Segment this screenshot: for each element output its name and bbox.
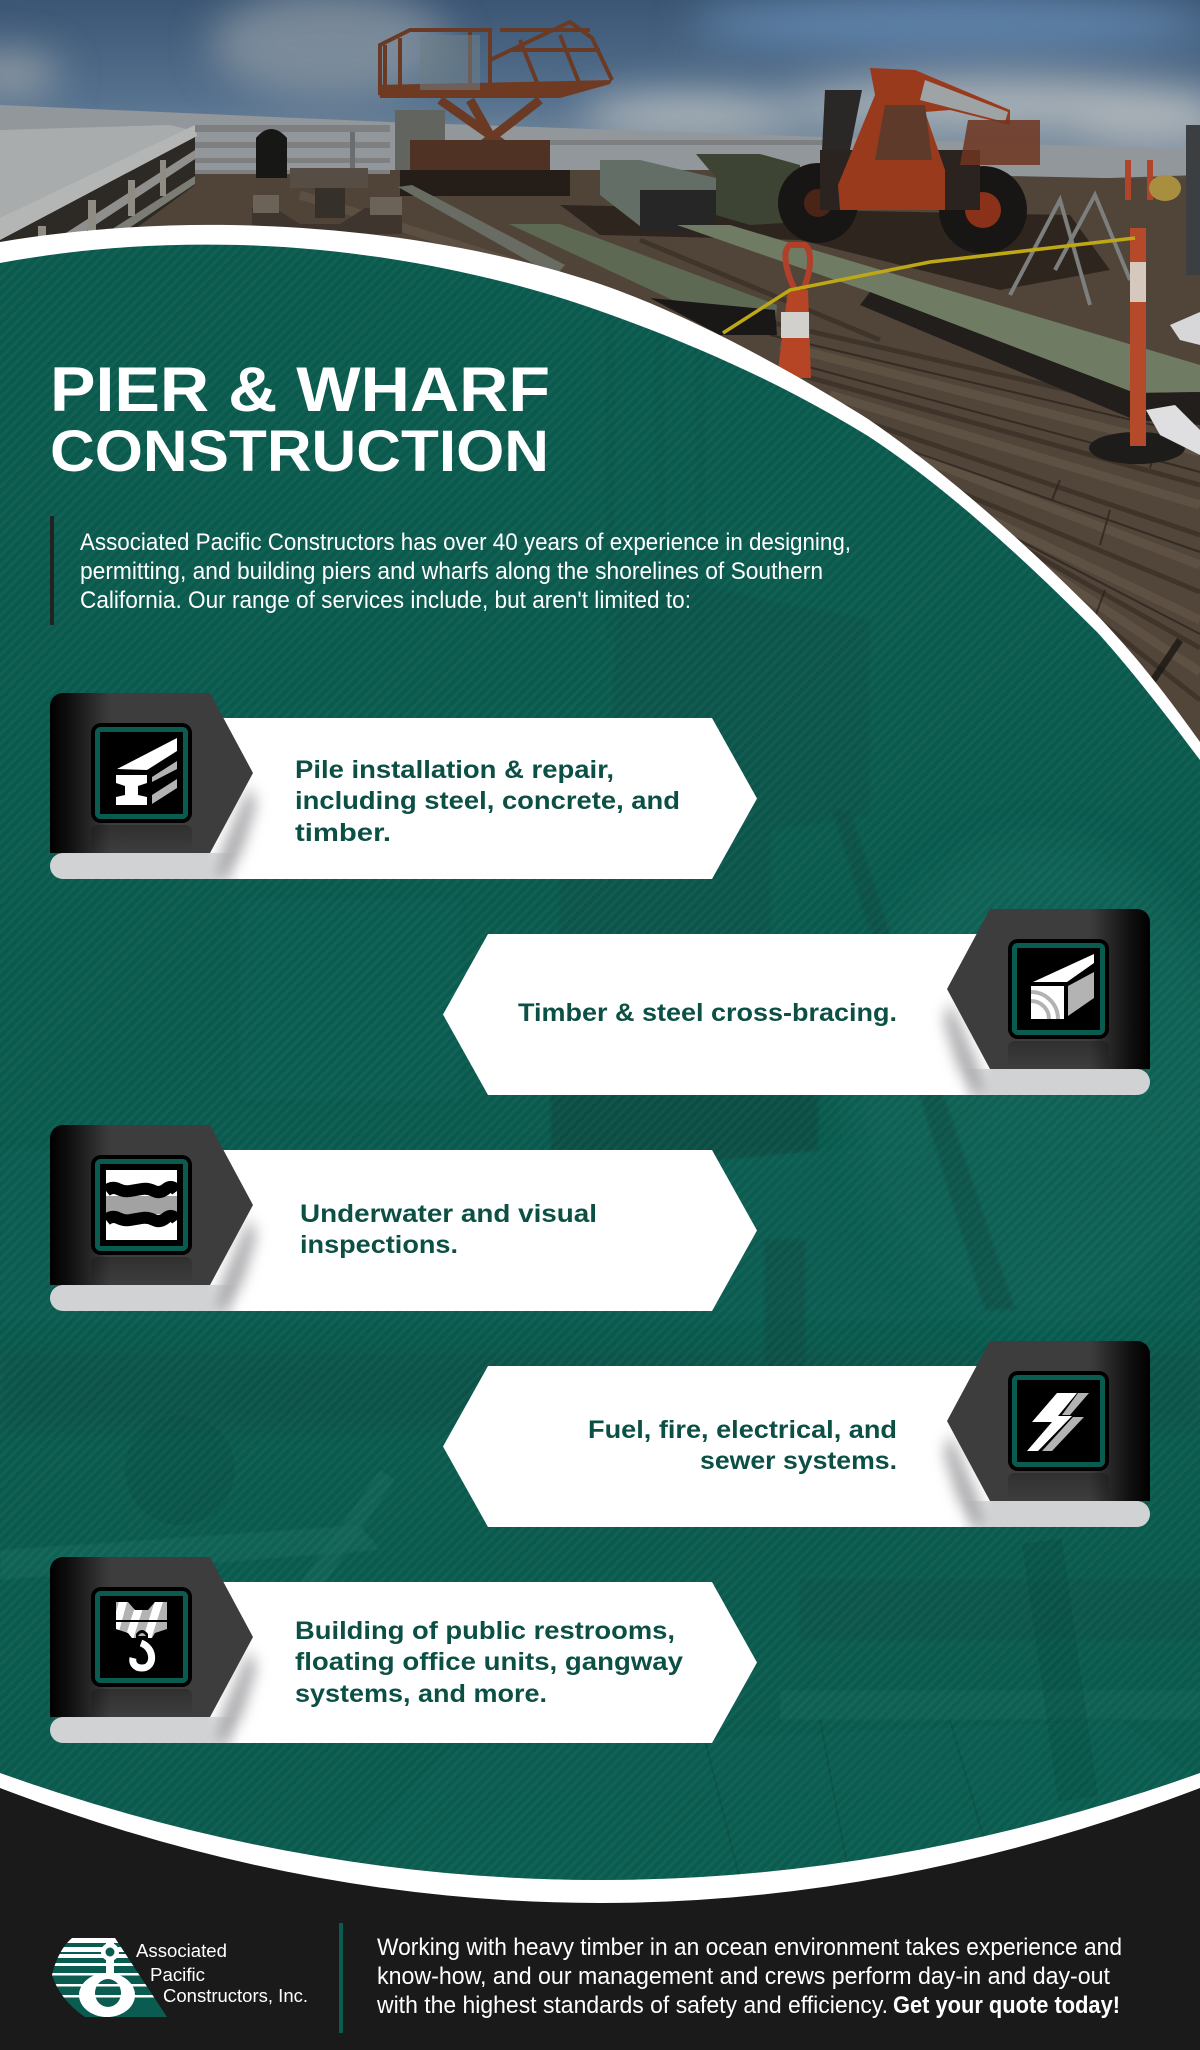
icon: water waves bbox=[106, 1170, 177, 1240]
card text bbox=[300, 1200, 597, 1259]
intro text: California. Our range of services include, but aren't limited to: bbox=[80, 587, 691, 614]
photo: pier deck with construction equipment bbox=[0, 0, 1200, 800]
card text bbox=[295, 756, 680, 847]
card 5: public restrooms and more bbox=[50, 1557, 757, 1743]
footer text bbox=[376, 1934, 1122, 2019]
card text: inspections. bbox=[300, 1231, 458, 1259]
right-edge fence and far cones bbox=[1186, 125, 1200, 275]
barrier cones and poles bbox=[777, 228, 1200, 464]
card 3: inspections bbox=[50, 1125, 757, 1311]
shadows under equipment bbox=[560, 205, 1110, 290]
icon: steel I-beam bbox=[116, 738, 177, 805]
card text: Timber & steel cross-bracing. bbox=[518, 999, 897, 1027]
card 2: cross-bracing bbox=[443, 909, 1150, 1095]
yellow safety tape bbox=[723, 238, 1135, 333]
logo wordmark: Pacific bbox=[150, 1965, 205, 1985]
logo wordmark: Associated bbox=[136, 1941, 227, 1961]
card text: Pile installation & repair, bbox=[295, 756, 614, 784]
icon: lightning bolt bbox=[1027, 1393, 1089, 1451]
card text: timber. bbox=[295, 819, 391, 847]
card 1: pile installation bbox=[50, 693, 757, 879]
timber beams bbox=[677, 225, 1200, 393]
footer divider bbox=[339, 1923, 343, 2033]
plank bands bbox=[300, 195, 1200, 700]
title bbox=[50, 355, 550, 484]
logo mark bbox=[50, 1938, 170, 2017]
card text bbox=[588, 1416, 897, 1475]
intro text: permitting, and building piers and wharfs along the shorelines of Southern bbox=[80, 558, 823, 585]
card text: including steel, concrete, and bbox=[295, 787, 680, 815]
card text: Underwater and visual bbox=[300, 1200, 597, 1228]
card text: Building of public restrooms, bbox=[295, 1617, 675, 1645]
footer background bbox=[0, 1788, 1200, 2050]
logo wordmark bbox=[136, 1941, 308, 2006]
title: PIER & WHARF bbox=[50, 355, 550, 425]
card 4: fuel and systems bbox=[443, 1341, 1150, 1527]
footer logo bbox=[50, 1938, 308, 2017]
footer text: with the highest standards of safety and efficiency. bbox=[376, 1992, 888, 2019]
footer text: Working with heavy timber in an ocean environment takes experience and bbox=[377, 1934, 1122, 1961]
icon: crane hook bbox=[116, 1602, 167, 1672]
lift machine bbox=[380, 22, 612, 170]
A-frame stands bbox=[1010, 195, 1130, 305]
intro text bbox=[80, 529, 851, 614]
intro text: Associated Pacific Constructors has over 40 years of experience in designing, bbox=[80, 529, 851, 556]
lumber stacks bbox=[600, 160, 716, 230]
card text: sewer systems. bbox=[700, 1447, 897, 1475]
title: CONSTRUCTION bbox=[50, 419, 549, 484]
icon: timber beam bbox=[1031, 954, 1094, 1019]
trash can and picnic table bbox=[256, 129, 287, 178]
telehandler bbox=[778, 68, 1040, 254]
card text: floating office units, gangway bbox=[295, 1648, 683, 1676]
card text: Fuel, fire, electrical, and bbox=[588, 1416, 897, 1444]
card text: systems, and more. bbox=[295, 1680, 547, 1708]
intro bar bbox=[50, 516, 54, 625]
card text bbox=[295, 1617, 683, 1708]
logo wordmark: Constructors, Inc. bbox=[163, 1986, 308, 2006]
footer text: Get your quote today! bbox=[893, 1992, 1120, 2019]
footer text: know-how, and our management and crews perform day-in and day-out bbox=[377, 1963, 1110, 1990]
railing bbox=[0, 125, 830, 255]
